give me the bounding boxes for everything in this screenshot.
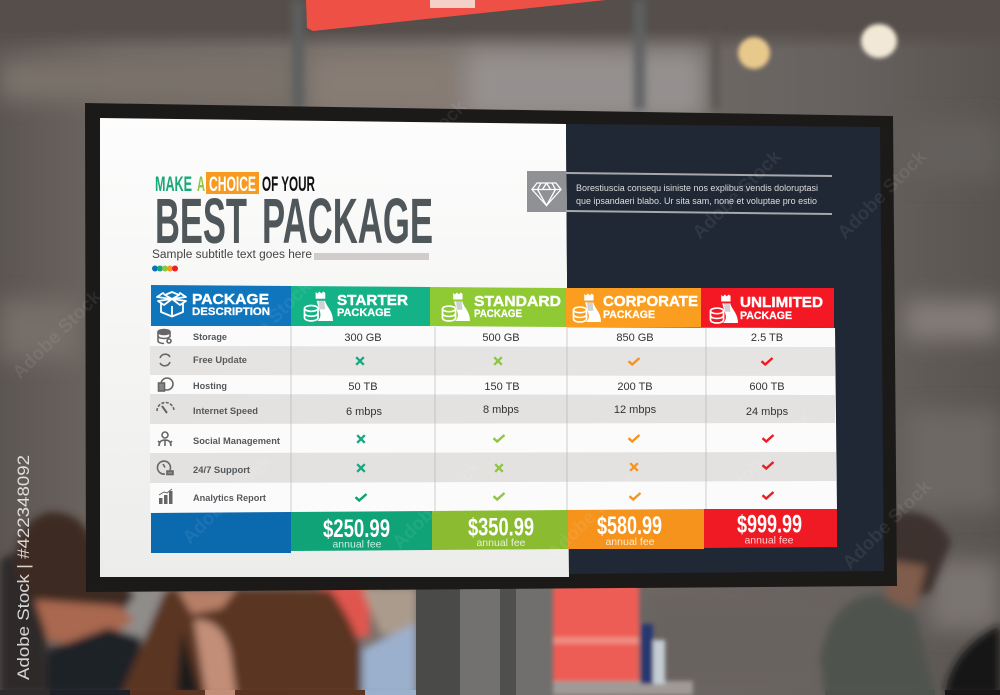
row: storage: 500 GB	[482, 332, 520, 344]
row: hosting: 50 TB	[348, 381, 378, 393]
stock watermarks: Adobe Stock	[719, 406, 816, 504]
header: unlimited	[701, 288, 834, 328]
row: storage: 300 GB	[344, 332, 382, 344]
stock watermarks: Adobe Stock	[219, 276, 316, 374]
heading: make a choice of your	[155, 172, 315, 196]
screen dark half	[566, 124, 884, 574]
footer: corporate price	[568, 509, 704, 549]
footer: empty blue cell	[151, 512, 291, 553]
header: corporate: CORPORATE	[603, 293, 698, 310]
header: unlimited: UNLIMITED	[740, 294, 823, 311]
footer: unlimited price: annual fee	[744, 534, 794, 546]
header: package description	[151, 285, 291, 326]
row: storage: Storage	[193, 332, 227, 343]
stock watermarks: Adobe Stock	[179, 451, 276, 549]
row: internet speed: 6 mbps	[346, 406, 383, 418]
screen white half	[100, 118, 569, 577]
heading: make a choice of your: CHOICE	[209, 173, 256, 196]
footer: standard price: $350.99	[468, 514, 534, 542]
footer: standard price	[432, 510, 568, 550]
row: internet speed: 12 mbps	[614, 404, 657, 416]
title: best package	[155, 185, 433, 257]
title: best package: PACKAGE	[262, 185, 433, 257]
red wall and bottles	[553, 585, 693, 695]
stock watermarks: Adobe Stock	[389, 456, 486, 554]
footer: unlimited price: $999.99	[737, 510, 802, 538]
stock watermarks: Adobe Stock	[374, 96, 471, 194]
header: standard: STANDARD	[474, 293, 561, 310]
row: internet speed: Internet Speed	[193, 406, 258, 417]
subtitle with bar and dots	[152, 249, 429, 272]
row: internet speed	[157, 402, 789, 418]
callout: diamond note: que ipsandaeri blabo. Ur sita sam, none et voluptae pro estio	[576, 196, 817, 206]
heading: make a choice of your: A	[197, 173, 205, 196]
footer: corporate price: $580.99	[597, 512, 662, 540]
header: package description: PACKAGE	[192, 291, 269, 308]
subtitle with bar and dots: Sample subtitle text goes here	[152, 249, 312, 261]
header: package description: DESCRIPTION	[192, 306, 270, 318]
vertical stock id: Adobe Stock | #422348092	[14, 455, 33, 680]
pricing table	[150, 285, 837, 553]
stock watermarks: Adobe Stock	[544, 466, 641, 564]
row: hosting	[158, 378, 785, 393]
footer: unlimited price	[704, 509, 837, 548]
row: internet speed: 24 mbps	[746, 406, 789, 418]
header: starter: STARTER	[337, 292, 408, 309]
row: 24/7 support	[157, 461, 773, 476]
row: internet speed: 8 mbps	[483, 404, 520, 416]
title: best package: BEST	[155, 185, 247, 257]
row: social management: Social Management	[193, 436, 281, 447]
stock watermarks: Adobe Stock	[689, 146, 786, 244]
row: free update	[160, 354, 772, 366]
header: starter	[291, 286, 430, 326]
header: standard	[430, 287, 566, 327]
footer: starter price: $250.99	[323, 515, 390, 543]
row: storage	[158, 330, 783, 344]
row: hosting: Hosting	[193, 381, 227, 392]
row: hosting: 200 TB	[617, 381, 653, 393]
footer: standard price: annual fee	[476, 537, 526, 549]
row: analytics report: Analytics Report	[193, 493, 267, 504]
header: unlimited: PACKAGE	[740, 310, 792, 322]
header: corporate: PACKAGE	[603, 309, 655, 321]
row: storage: 2.5 TB	[751, 332, 783, 344]
row: hosting: 600 TB	[749, 381, 785, 393]
row: storage: 850 GB	[616, 332, 654, 344]
blurred visitors	[0, 512, 1000, 695]
header: standard: PACKAGE	[474, 308, 522, 320]
row: analytics report	[159, 489, 774, 504]
footer: corporate price: annual fee	[605, 536, 655, 548]
heading: make a choice of your: MAKE	[155, 173, 192, 196]
red banner and ceiling lights	[306, 0, 897, 69]
header: starter: PACKAGE	[337, 307, 391, 319]
callout: diamond note: Borestiuscia consequ isiniste nos explibus vendis doloruptasi	[576, 183, 818, 193]
heading: make a choice of your: OF YOUR	[262, 173, 315, 196]
monitor frame	[85, 103, 897, 592]
callout: diamond note	[527, 171, 832, 214]
stock watermarks: Adobe Stock	[839, 476, 936, 574]
row: 24/7 support: 24/7 Support	[193, 465, 251, 476]
row: hosting: 150 TB	[484, 381, 520, 393]
table rows background	[150, 326, 837, 513]
stand column	[416, 588, 553, 695]
stock watermarks: Adobe Stock	[834, 146, 931, 244]
header: corporate	[566, 288, 701, 327]
row: social management	[158, 432, 774, 447]
footer: starter price	[291, 511, 432, 551]
stock watermarks: Adobe Stock	[9, 286, 106, 384]
stock watermarks	[9, 96, 936, 574]
row: free update: Free Update	[193, 355, 247, 366]
footer: starter price: annual fee	[332, 538, 382, 550]
